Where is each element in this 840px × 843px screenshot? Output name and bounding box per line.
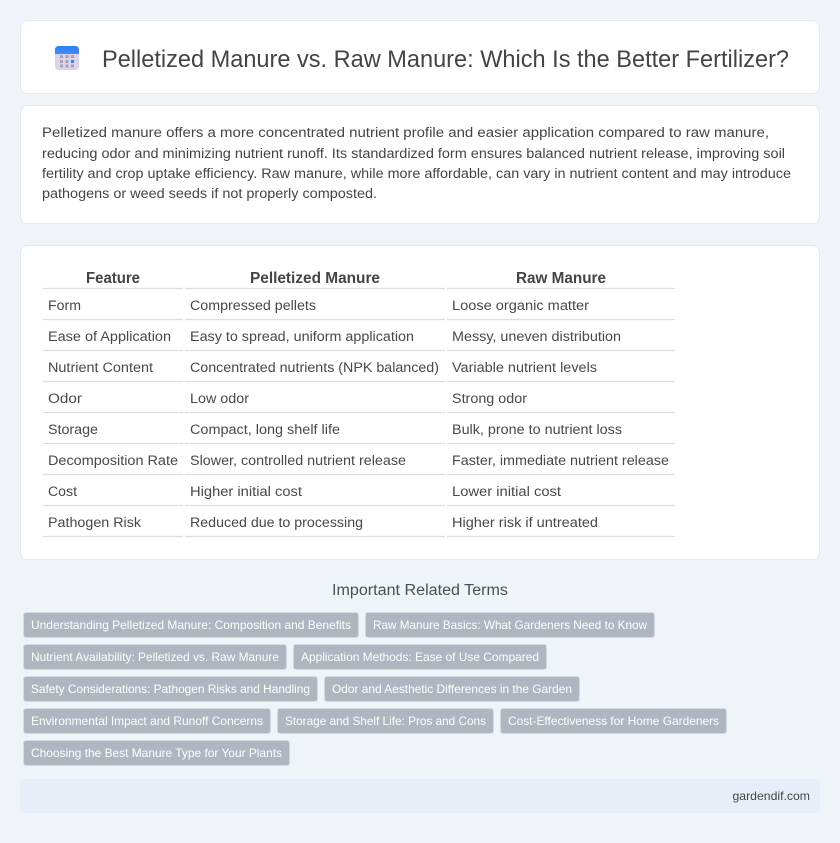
row: decomposition rate: Faster, immediate nutrient release [452,453,669,469]
related term tags: Environmental Impact and Runoff Concerns [31,714,263,728]
row: form: Loose organic matter [452,298,589,314]
title: Pelletized Manure vs. Raw Manure: Which Is the Better Fertilizer? [102,46,789,73]
row: ease of application [48,329,621,345]
row: ease of application: Easy to spread, uniform application [190,329,414,345]
row: storage: Storage [48,422,98,438]
row: cost [48,484,561,500]
text block: summary paragraph: pathogens or weed seeds if not properly composted. [42,186,377,202]
row: pathogen risk [48,515,598,531]
related term tags: Cost-Effectiveness for Home Gardeners [508,714,719,728]
row: cost: Higher initial cost [190,484,302,500]
row: decomposition rate [48,453,669,469]
icon: calendar [55,46,79,70]
row: cost: Lower initial cost [452,484,561,500]
row: nutrient content: Variable nutrient levels [452,360,597,376]
row: ease of application: Ease of Application [48,329,171,345]
row: form: Compressed pellets [190,298,316,314]
related term tags: Application Methods: Ease of Use Compared [301,650,539,664]
row: pathogen risk: Higher risk if untreated [452,515,598,531]
panel: comparison table [20,246,820,560]
text block: summary paragraph: fertility and crop uptake efficiency. Raw manure, while more affordable, can vary in nutrient content and may introduce [42,166,791,182]
row: ease of application: Messy, uneven distribution [452,329,621,345]
row: storage: Compact, long shelf life [190,422,340,438]
row: odor [48,391,527,407]
related term tags: Choosing the Best Manure Type for Your Plants [31,746,282,760]
related term tags: Understanding Pelletized Manure: Composition and Benefits [31,618,351,632]
row: pathogen risk: Pathogen Risk [48,515,142,531]
table header row: Feature [86,270,140,287]
row: odor: Low odor [190,391,249,407]
table header row: Pelletized Manure [250,270,380,287]
related term tags: Raw Manure Basics: What Gardeners Need to Know [373,618,647,632]
row: nutrient content [48,360,597,376]
row: decomposition rate: Slower, controlled nutrient release [190,453,406,469]
table header row: Raw Manure [516,270,606,287]
row: odor: Odor [48,391,82,407]
text block: summary paragraph: reducing odor and minimizing nutrient runoff. Its standardized form ensures balanced nutrient release, improving soil [42,146,785,162]
row: form: Form [48,298,81,314]
panel: introduction [20,106,820,224]
row: storage: Bulk, prone to nutrient loss [452,422,622,438]
related term tags: Safety Considerations: Pathogen Risks and Handling [31,682,310,696]
row: pathogen risk: Reduced due to processing [190,515,363,531]
text block: summary paragraph [42,125,791,202]
row: storage [48,422,622,438]
row: form [48,298,589,314]
row: cost: Cost [48,484,77,500]
related term tags: Nutrient Availability: Pelletized vs. Raw Manure [31,650,279,664]
footer source text: gardendif.com [732,789,810,803]
related term tags: Storage and Shelf Life: Pros and Cons [285,714,486,728]
footer [20,779,820,813]
related term tags: Odor and Aesthetic Differences in the Garden [332,682,572,696]
related term tags [24,612,726,766]
row: odor: Strong odor [452,391,527,407]
row: decomposition rate: Decomposition Rate [48,453,178,469]
heading: important related terms: Important Related Terms [332,582,508,599]
table header row [86,270,606,287]
text block: summary paragraph: Pelletized manure offers a more concentrated nutrient profile and easier application compared to raw manure, [42,125,769,141]
row: nutrient content: Concentrated nutrients (NPK balanced) [190,360,439,376]
panel: header [20,20,820,94]
row: nutrient content: Nutrient Content [48,360,153,376]
